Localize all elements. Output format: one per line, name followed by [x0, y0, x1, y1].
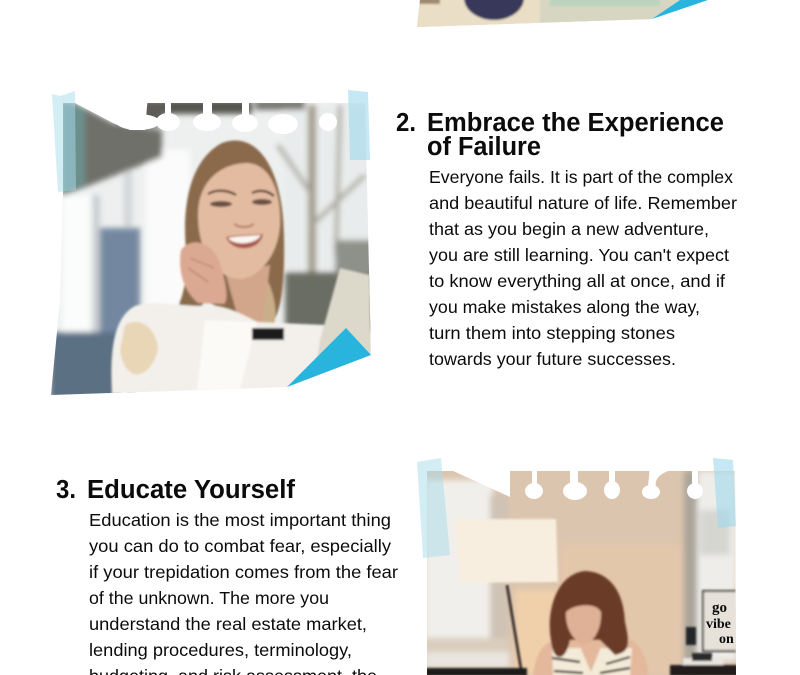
tape: right top of photo 2	[713, 458, 736, 528]
heading: step 2: Embrace the Experience	[427, 109, 724, 137]
tree	[308, 105, 316, 345]
text block: step 3 body	[89, 510, 398, 675]
poster	[702, 590, 736, 652]
desk	[425, 668, 527, 675]
text block: step 3 body: you can do to combat fear, especially	[89, 536, 391, 556]
tape: left top of photo 1	[52, 91, 76, 192]
tape: left top of photo 2	[417, 458, 450, 558]
tablet	[317, 268, 371, 360]
lamp	[455, 519, 558, 583]
neck	[226, 265, 270, 328]
text block: step 2 body: and beautiful nature of life. Remember	[429, 193, 737, 213]
photo: woman at desk under lamp	[425, 465, 740, 675]
text block: step 3 body: Education is the most important thing	[89, 510, 391, 530]
text block: step 3 body: of the unknown. The more you	[89, 588, 329, 608]
blue building	[100, 228, 140, 338]
torn paper top edge	[60, 92, 370, 134]
photo: woman on the phone	[45, 92, 375, 402]
columns and sky	[62, 195, 92, 335]
window left	[425, 480, 493, 655]
text block: step 2 body: towards your future successes.	[429, 349, 676, 369]
poster lettering: go	[712, 600, 727, 616]
photo: top cropped image	[417, 0, 680, 27]
text block: step 2 body	[429, 167, 737, 369]
icon: blue corner triangle	[287, 328, 371, 387]
photo: woman at desk under lamp: vibe	[706, 617, 731, 632]
roof	[60, 100, 162, 195]
icon: top blue corner triangle	[652, 0, 708, 19]
text block: step 3 body: understand the real estate market,	[89, 614, 367, 634]
text block: step 2 body: Everyone fails. It is part of the complex	[429, 167, 733, 187]
text block: step 3 body: if your trepidation comes from the fear	[89, 562, 398, 582]
tape: right top of photo 1	[348, 90, 370, 160]
face	[198, 163, 280, 279]
text block: step 2 body: you are still learning. You can't expect	[429, 245, 729, 265]
heading: step 2: 2.	[396, 109, 416, 137]
hair	[178, 139, 286, 318]
hand	[180, 242, 226, 304]
right pillar and window	[684, 471, 697, 671]
photo: woman at desk under lamp: on	[719, 632, 734, 647]
text block: step 2 body: you make mistakes along the way,	[429, 297, 700, 317]
woman	[533, 640, 648, 675]
text block: step 2 body: turn them into stepping stones	[429, 323, 675, 343]
heading: step 3: Educate Yourself	[87, 476, 295, 504]
text block: step 3 body: lending procedures, terminology,	[89, 640, 352, 660]
jacket	[111, 303, 325, 395]
text block: step 2 body: to know everything all at once, and if	[429, 271, 725, 291]
heading: step 3: 3.	[56, 476, 76, 504]
heading: step 2: of Failure	[427, 133, 541, 161]
wall glow	[560, 545, 682, 675]
text block: step 2 body: that as you begin a new adventure,	[429, 219, 709, 239]
heading: step 2	[396, 109, 724, 161]
torn paper top edge	[440, 465, 703, 500]
